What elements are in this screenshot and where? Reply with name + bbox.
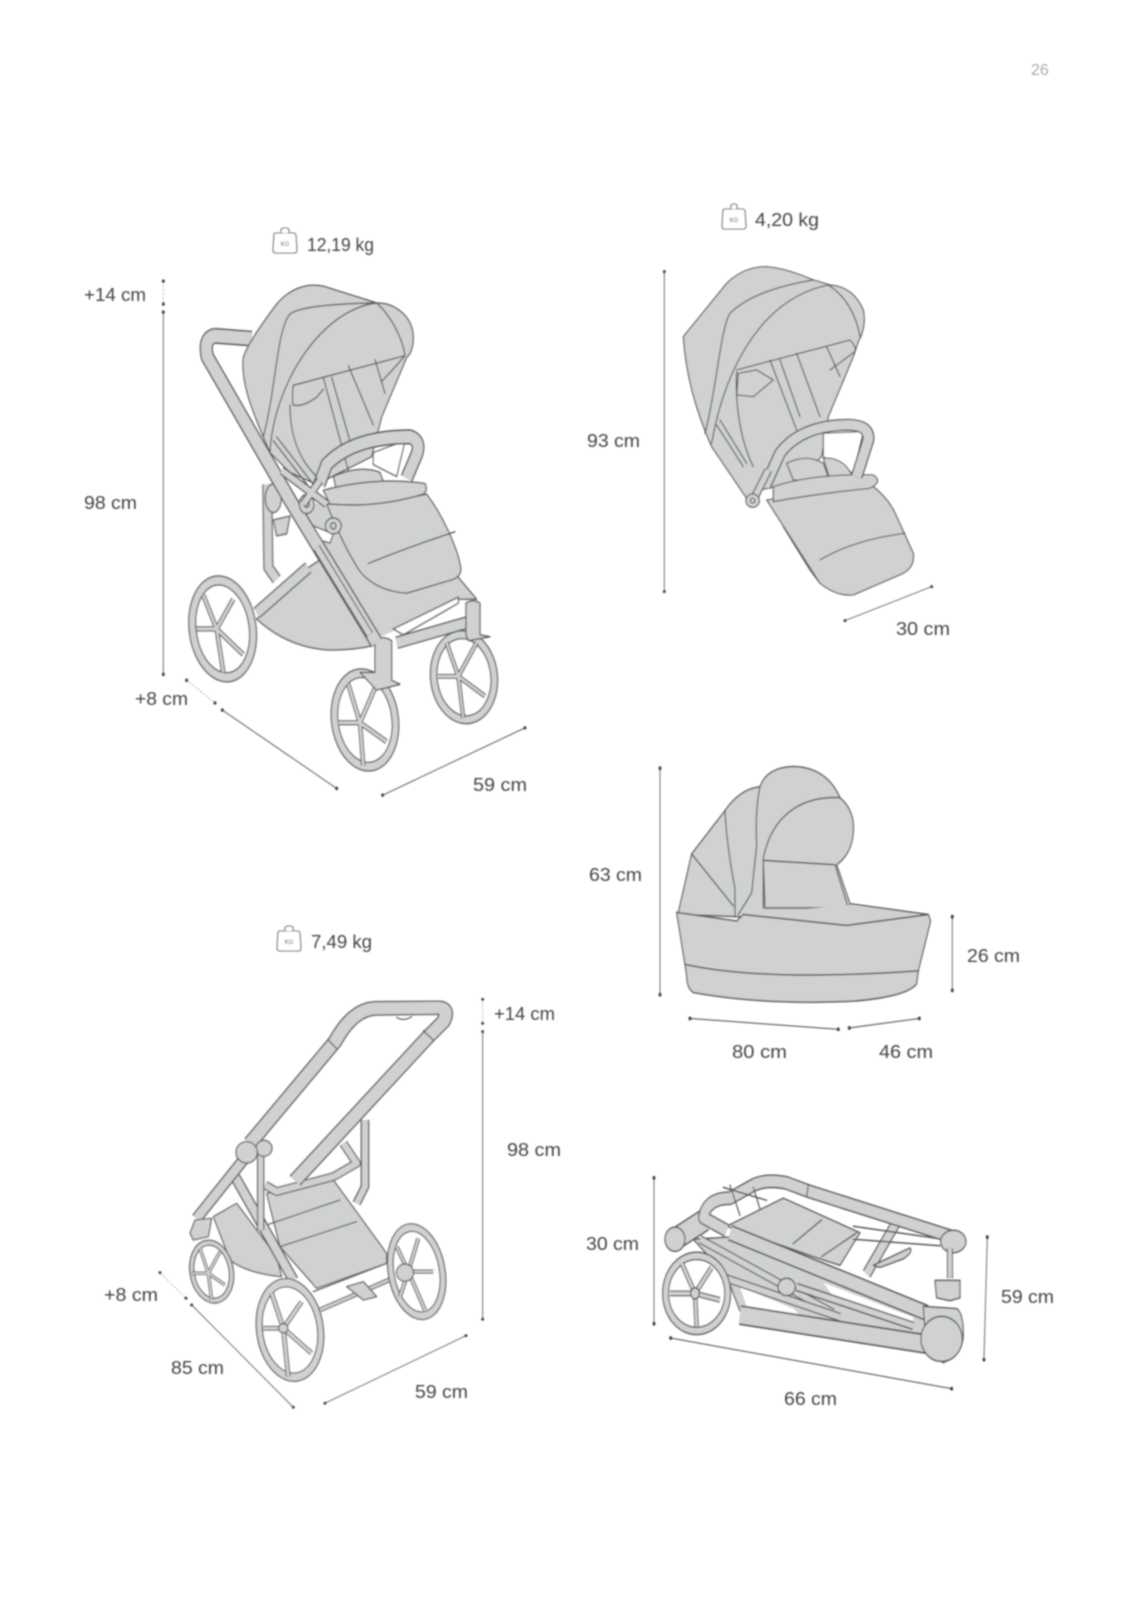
- label: +14 cm: +14 cm: [494, 1004, 555, 1024]
- label: 26 cm: 26 cm: [967, 946, 1020, 966]
- panel: frame chassis: [104, 926, 561, 1407]
- label: +14 cm: +14 cm: [84, 285, 146, 305]
- weight: 4,20 kg: KG: [730, 218, 739, 224]
- weight: 4,20 kg: [722, 204, 819, 230]
- label: +8 cm: +8 cm: [104, 1285, 158, 1305]
- weight: 7,49 kg: KG: [285, 940, 294, 946]
- label: 59 cm: 59 cm: [1001, 1287, 1054, 1307]
- label: 46 cm: 46 cm: [879, 1042, 933, 1062]
- label: +8 cm: +8 cm: [135, 689, 188, 709]
- weight: 7,49 kg: [277, 926, 372, 952]
- weight: 7,49 kg: 7,49 kg: [311, 932, 372, 952]
- weight: 12,19 kg: 12,19 kg: [307, 235, 374, 255]
- illustration: frame: [160, 999, 483, 1407]
- panel: seat unit: [587, 204, 950, 639]
- panel: folded stroller: [586, 1178, 1054, 1409]
- label: 98 cm: 98 cm: [84, 493, 137, 513]
- weight: 12,19 kg: KG: [281, 242, 290, 248]
- weight: 12,19 kg: [273, 228, 374, 255]
- page number: 26: [1031, 62, 1049, 79]
- label: 80 cm: 80 cm: [732, 1042, 787, 1062]
- label: 66 cm: 66 cm: [784, 1389, 837, 1409]
- weight: 4,20 kg: 4,20 kg: [755, 210, 819, 230]
- illustration: seat: [664, 267, 932, 621]
- label: 30 cm: 30 cm: [896, 619, 950, 639]
- panel: carrycot: [589, 766, 1020, 1062]
- label: 59 cm: 59 cm: [415, 1382, 468, 1402]
- label: 63 cm: 63 cm: [589, 865, 642, 885]
- panel: stroller with seat: [84, 228, 527, 795]
- illustration: carrycot: [660, 766, 952, 1029]
- label: 98 cm: 98 cm: [507, 1140, 561, 1160]
- label: 93 cm: 93 cm: [587, 431, 640, 451]
- label: 59 cm: 59 cm: [473, 775, 527, 795]
- illustration: folded frame: [654, 1178, 987, 1389]
- illustration: complete stroller: [163, 281, 525, 795]
- label: 85 cm: 85 cm: [171, 1358, 224, 1378]
- label: 30 cm: 30 cm: [586, 1234, 639, 1254]
